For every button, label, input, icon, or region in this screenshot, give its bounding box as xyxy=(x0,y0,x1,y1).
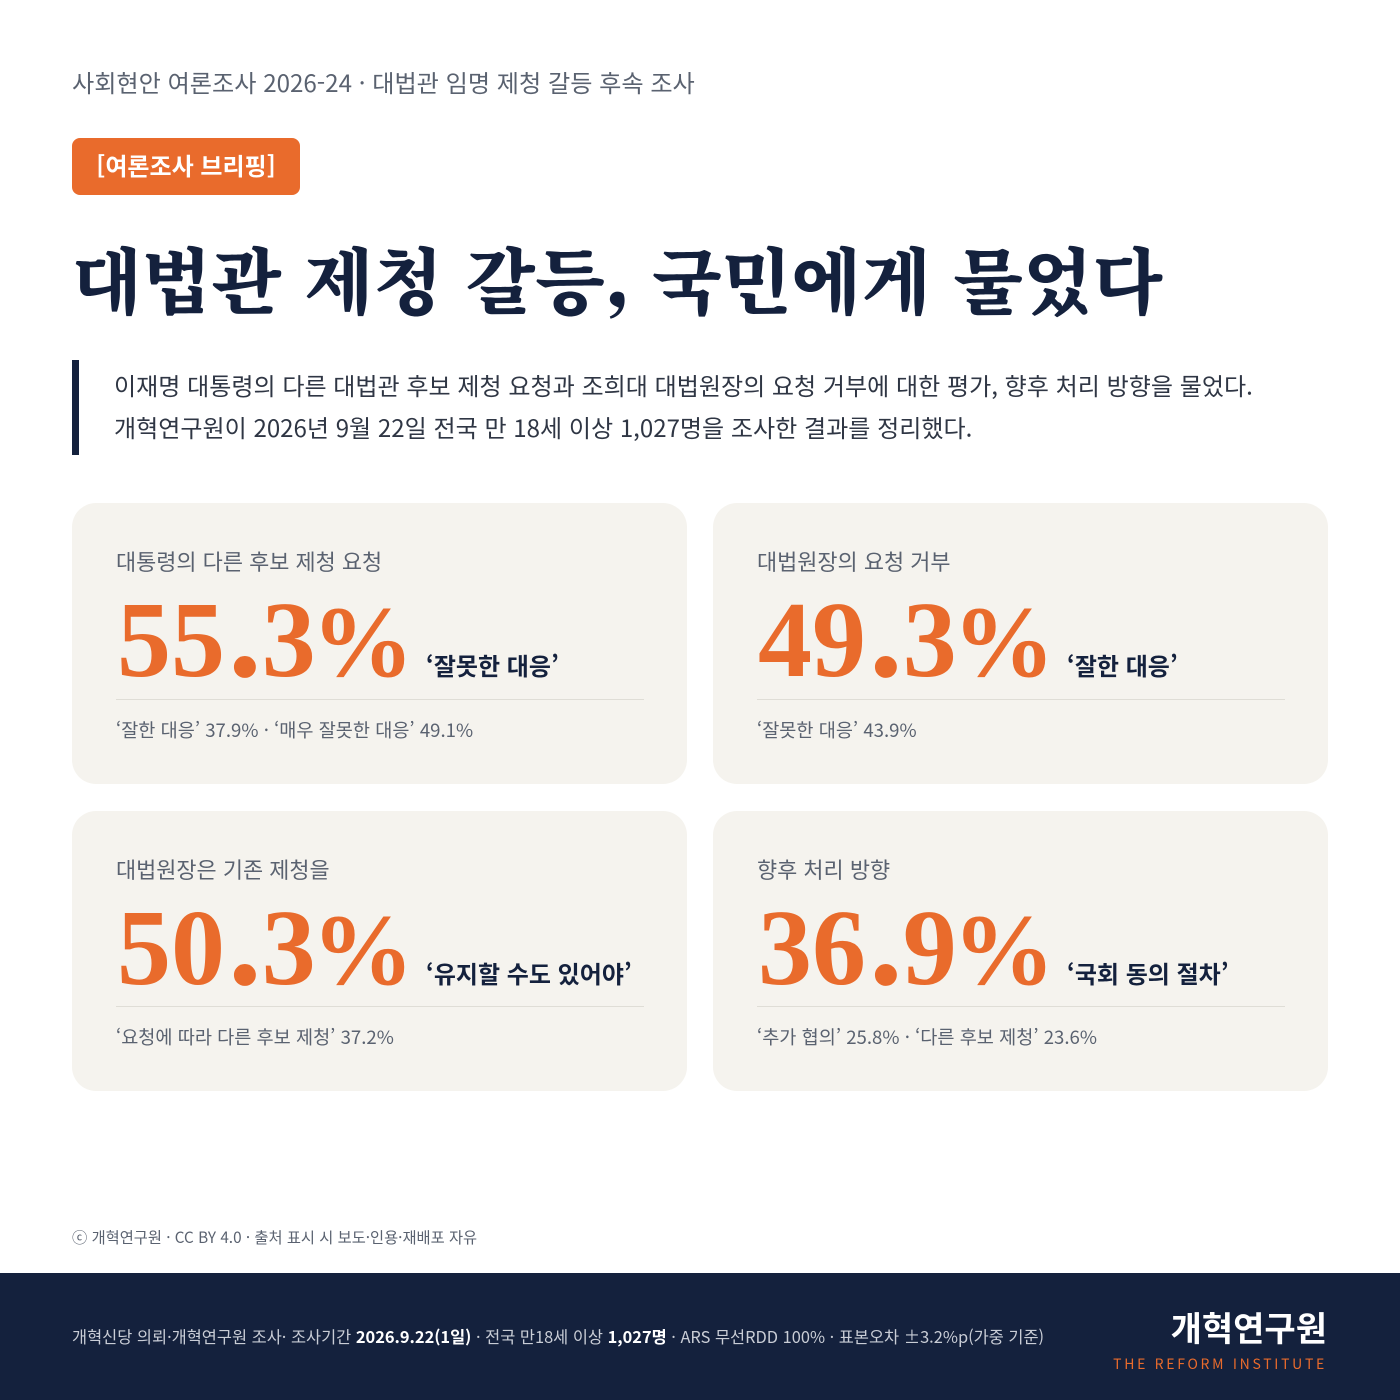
intro text block with accent bar: 개혁연구원이 2026년 9월 22일 전국 만 18세 이상 1,027명을 조사한 결과를 정리했다. xyxy=(114,409,972,444)
panel: president's request: ‘잘한 대응’ 37.9% · ‘매우 잘못한 대응’ 49.1% xyxy=(116,716,473,743)
badge: briefing xyxy=(72,138,300,195)
panel: keep existing nomination: ‘요청에 따라 다른 후보 제청’ 37.2% xyxy=(116,1022,394,1050)
eyebrow: survey name: 사회현안 여론조사 2026-24 · 대법관 임명 제청 갈등 후속 조사 xyxy=(72,64,695,99)
panel: keep existing nomination: ‘유지할 수도 있어야’ xyxy=(426,954,632,990)
license note: ⓒ 개혁연구원 · CC BY 4.0 · 출처 표시 시 보도·인용·재배포 자유 xyxy=(72,1226,477,1248)
panel: keep existing nomination: 50.3% xyxy=(117,864,414,1014)
panel: future handling xyxy=(713,810,1328,1091)
panel: future handling: ‘추가 협의’ 25.8% · ‘다른 후보 제청’ 23.6% xyxy=(757,1022,1097,1050)
logo subtitle: THE REFORM INSTITUTE xyxy=(1113,1354,1327,1374)
panel: keep existing nomination xyxy=(72,810,686,1091)
panel: future handling: 향후 처리 방향 xyxy=(757,854,890,884)
panel: chief justice's refusal: 대법원장의 요청 거부 xyxy=(757,546,951,577)
panel: future handling: 36.9% xyxy=(758,864,1055,1014)
survey method: 개혁신당 의뢰·개혁연구원 조사· 조사기간 2026.9.22(1일) · 전국 만18세 이상 1,027명 · ARS 무선RDD 100% · 표본오차 ±3.2%p(가중 기준) xyxy=(72,1324,1044,1348)
panel: chief justice's refusal: ‘잘한 대응’ xyxy=(1067,647,1178,682)
panel: president's request: ‘잘못한 대응’ xyxy=(426,647,559,682)
panel: president's request: 대통령의 다른 후보 제청 요청 xyxy=(116,546,382,577)
panel: chief justice's refusal: ‘잘못한 대응’ 43.9% xyxy=(757,716,917,743)
title: 대법관 제청 갈등, 국민에게 물었다 xyxy=(72,225,1162,329)
panel: future handling: ‘국회 동의 절차’ xyxy=(1067,954,1229,990)
intro text block with accent bar: 이재명 대통령의 다른 대법관 후보 제청 요청과 조희대 대법원장의 요청 거부에 대한 평가, 향후 처리 방향을 물었다. xyxy=(114,367,1253,402)
intro text block with accent bar xyxy=(72,360,1328,455)
footer band xyxy=(0,1273,1400,1400)
logo wordmark: 개혁연구원 xyxy=(1171,1302,1327,1351)
panel: president's request xyxy=(72,503,686,784)
panel: chief justice's refusal xyxy=(713,503,1328,784)
panel: keep existing nomination: 대법원장은 기존 제청을 xyxy=(116,854,330,884)
badge: briefing: [여론조사 브리핑] xyxy=(96,147,276,182)
panel: president's request: 55.3% xyxy=(117,557,414,706)
panel: chief justice's refusal: 49.3% xyxy=(758,557,1055,706)
